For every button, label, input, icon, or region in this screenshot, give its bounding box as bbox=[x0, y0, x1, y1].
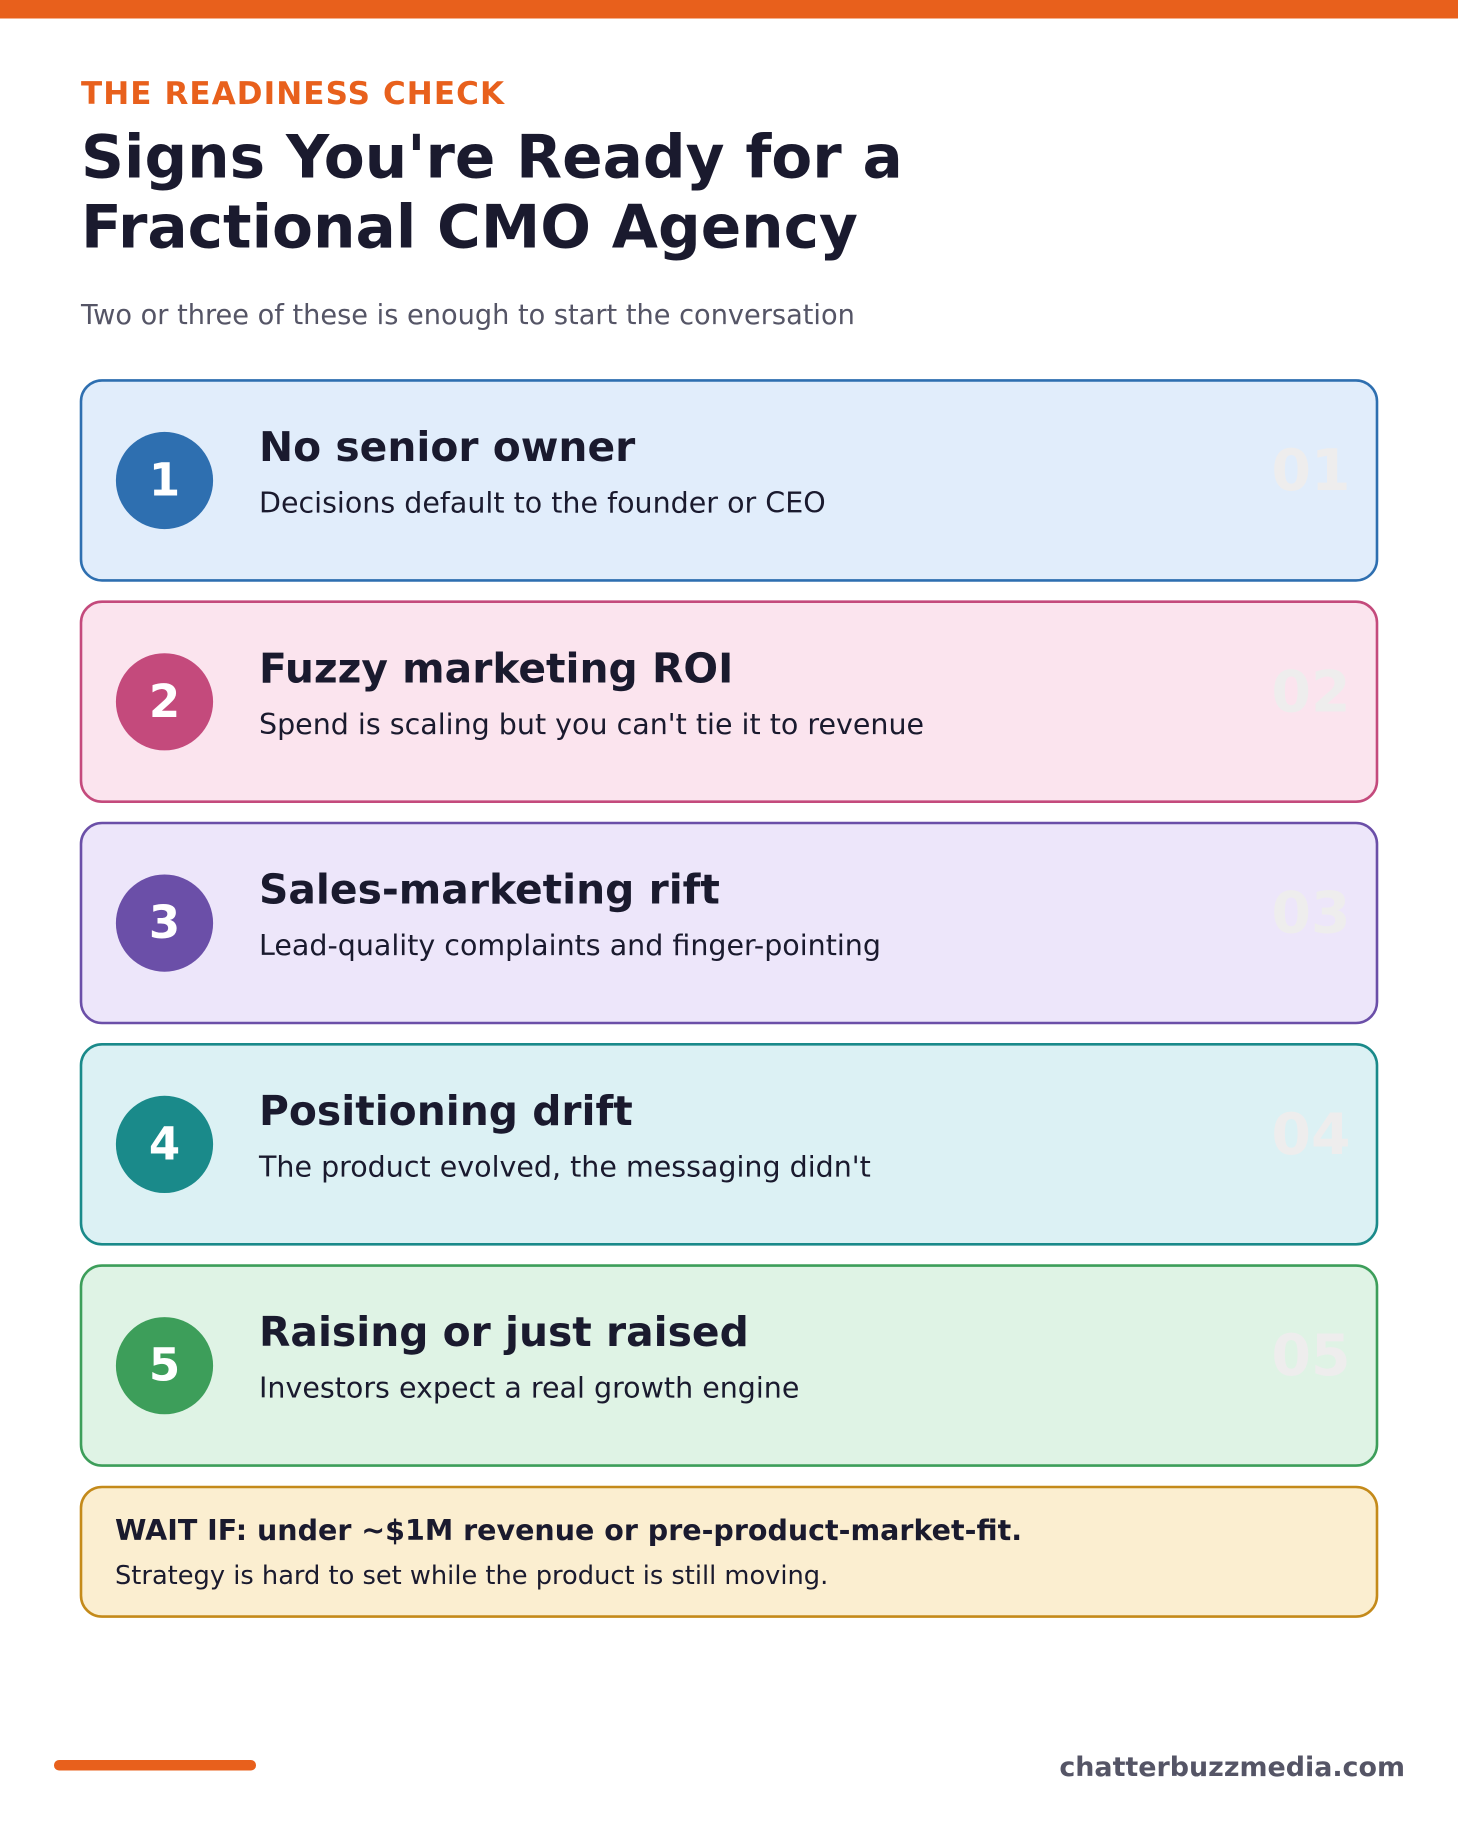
icon: number 2 bbox=[116, 653, 213, 750]
ghost number 04: 04 bbox=[1272, 1102, 1350, 1168]
icon: number 4: 4 bbox=[149, 1117, 180, 1170]
panel: sign 1 bbox=[81, 380, 1377, 580]
icon: number 3: 3 bbox=[149, 896, 180, 949]
description: Decisions default to the founder or CEO bbox=[259, 486, 826, 520]
description: Lead-quality complaints and finger-pointing bbox=[259, 929, 881, 962]
callout heading: WAIT IF: under ~$1M revenue or pre-product-market-fit. bbox=[115, 1514, 1022, 1547]
ghost number 05: 05 bbox=[1272, 1323, 1350, 1389]
icon: number 1 bbox=[116, 432, 213, 529]
ghost number 01: 01 bbox=[1272, 438, 1350, 504]
subtitle: Two or three of these is enough to start the conversation bbox=[80, 300, 855, 331]
footer accent bar bbox=[54, 1760, 256, 1770]
description: Investors expect a real growth engine bbox=[259, 1372, 799, 1405]
panel: sign 3 bbox=[81, 823, 1377, 1023]
callout: wait if bbox=[81, 1487, 1377, 1617]
ghost number 03: 03 bbox=[1272, 881, 1350, 947]
ghost number 02: 02 bbox=[1272, 659, 1350, 725]
heading: no senior owner: No senior owner bbox=[259, 423, 635, 471]
title: Signs You're Ready for a bbox=[81, 124, 903, 192]
icon: number 3 bbox=[116, 874, 213, 972]
eyebrow heading: THE READINESS CHECK bbox=[81, 76, 505, 112]
description: Spend is scaling but you can't tie it to revenue bbox=[259, 708, 924, 741]
icon: number 1: 1 bbox=[149, 454, 180, 506]
top accent bar bbox=[0, 0, 1458, 18]
title bbox=[81, 124, 903, 262]
heading: positioning drift: Positioning drift bbox=[259, 1087, 633, 1135]
footer website: chatterbuzzmedia.com bbox=[1059, 1752, 1405, 1783]
panel: sign 4 bbox=[81, 1044, 1377, 1244]
heading: fuzzy marketing roi: Fuzzy marketing ROI bbox=[259, 644, 733, 692]
heading: raising or just raised: Raising or just raised bbox=[259, 1308, 749, 1356]
heading: sales-marketing rift: Sales-marketing rift bbox=[259, 866, 720, 914]
description: The product evolved, the messaging didn't bbox=[258, 1150, 871, 1183]
panel: sign 2 bbox=[81, 602, 1377, 802]
callout text: Strategy is hard to set while the product is still moving. bbox=[115, 1561, 828, 1591]
panel: sign 5 bbox=[81, 1266, 1377, 1466]
icon: number 5: 5 bbox=[149, 1339, 180, 1392]
title: Fractional CMO Agency bbox=[81, 194, 858, 262]
icon: number 4 bbox=[116, 1096, 213, 1193]
icon: number 2: 2 bbox=[149, 675, 180, 728]
icon: number 5 bbox=[116, 1317, 213, 1414]
